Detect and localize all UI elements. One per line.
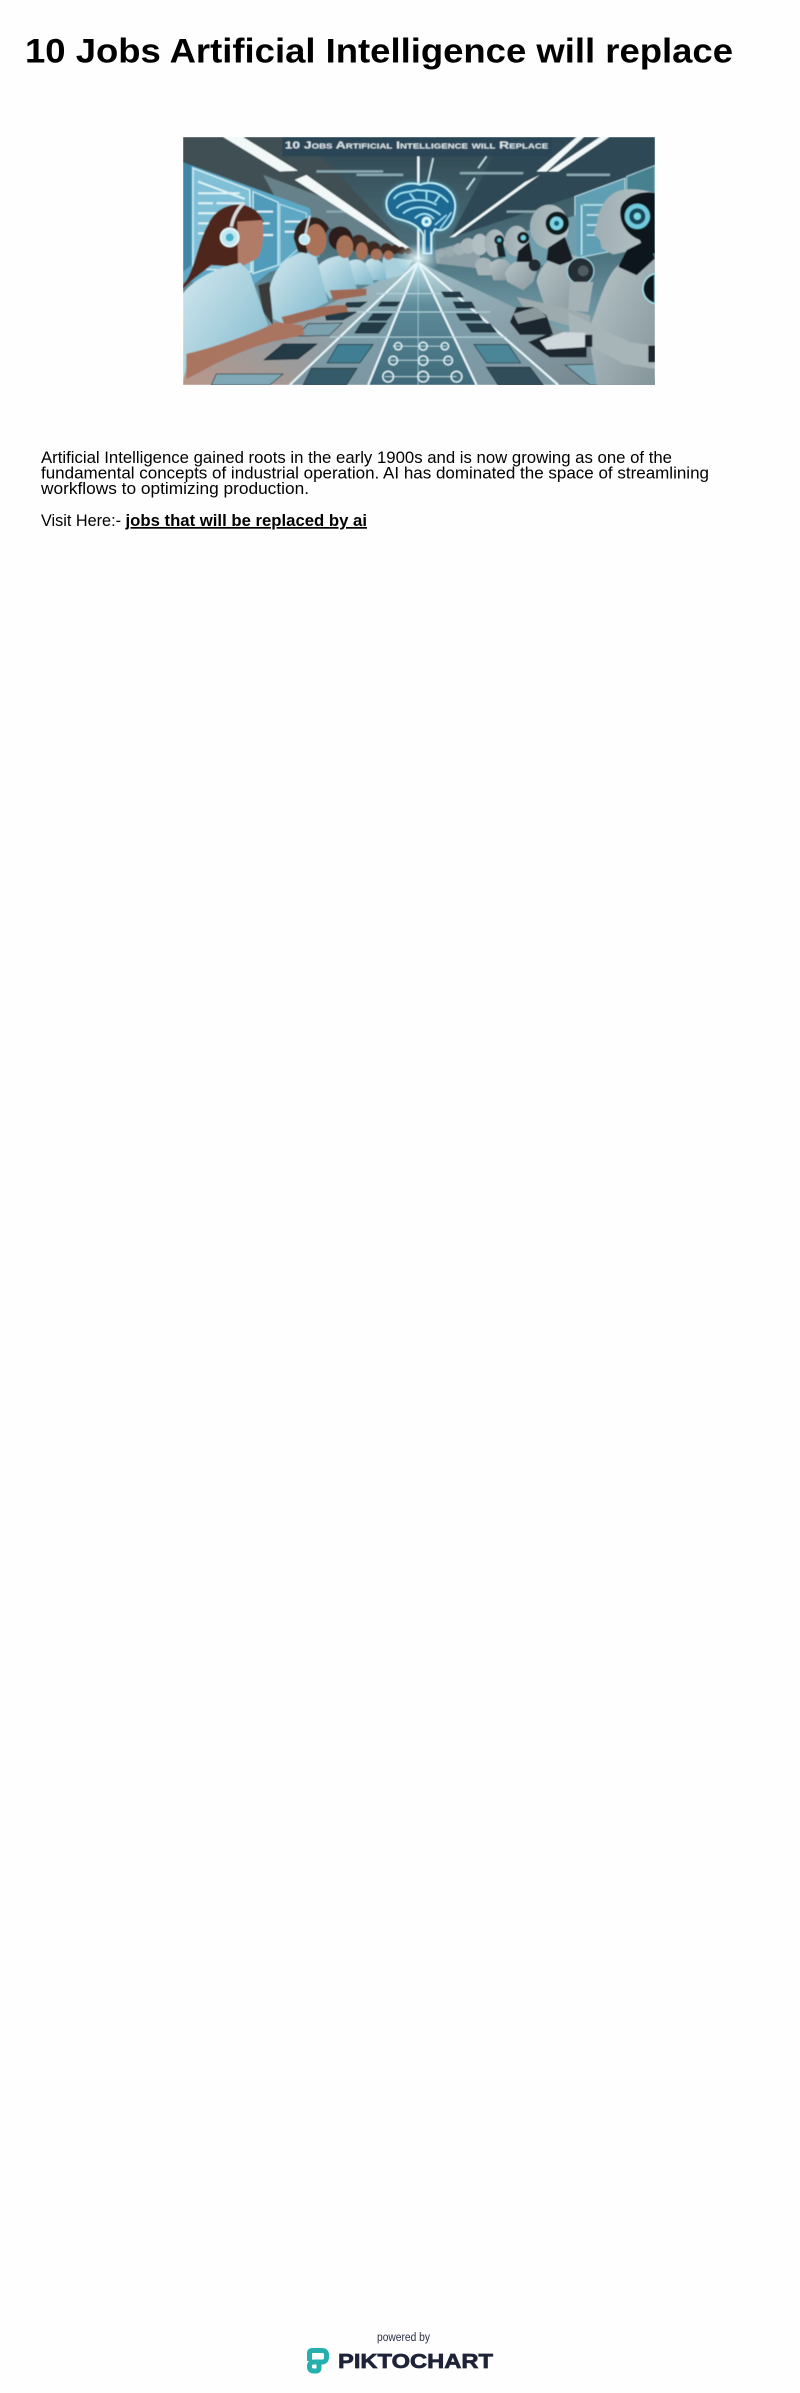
glowing brain: [386, 183, 455, 253]
worker 2: [270, 216, 348, 325]
vanishing point glow: [395, 243, 442, 274]
desks: [183, 262, 655, 385]
ceiling lights: [223, 137, 609, 252]
title banner in illustration: 10 Jobs Artificial Intelligence will Replace: [285, 141, 549, 152]
illustration: office workers and robots at desks: [183, 137, 655, 385]
worker 3: [316, 226, 366, 300]
vertical light beam: [417, 156, 420, 260]
tablets: [211, 292, 655, 385]
footer: powered by Piktochart: [307, 2332, 494, 2374]
robot 1: [528, 189, 655, 385]
title: 10 Jobs Artificial Intelligence will replace: [25, 32, 733, 70]
icon: Piktochart logo: [310, 2350, 326, 2371]
visit line: jobs that will be replaced by ai: [125, 511, 367, 530]
circuit nodes: [383, 342, 462, 382]
powered by label: powered by: [377, 2332, 430, 2344]
distant robots: [435, 234, 493, 275]
paragraph line 1: Artificial Intelligence gained roots in the early 1900s and is now growing as one of the: [41, 448, 672, 467]
paragraph line 3: workflows to optimizing production.: [40, 479, 309, 498]
wordmark: PIKTOCHART: [338, 2350, 494, 2373]
screens on left wall: [183, 162, 320, 285]
robot 4: [485, 229, 511, 280]
woman with headset: [183, 203, 304, 381]
title banner in illustration: [282, 137, 552, 156]
distant workers: [345, 235, 413, 285]
chair behind worker 2: [258, 282, 273, 325]
robot 2: [510, 205, 594, 335]
screens on right wall: [503, 165, 655, 265]
intro text block: [40, 448, 709, 530]
row of robots: [435, 189, 655, 385]
row of human workers: [183, 203, 413, 381]
visit line: Visit Here:-: [41, 511, 121, 530]
robot 3: [505, 226, 541, 290]
room background: [183, 137, 655, 385]
paragraph line 2: fundamental concepts of industrial operation. AI has dominated the space of streamlining: [41, 464, 709, 482]
